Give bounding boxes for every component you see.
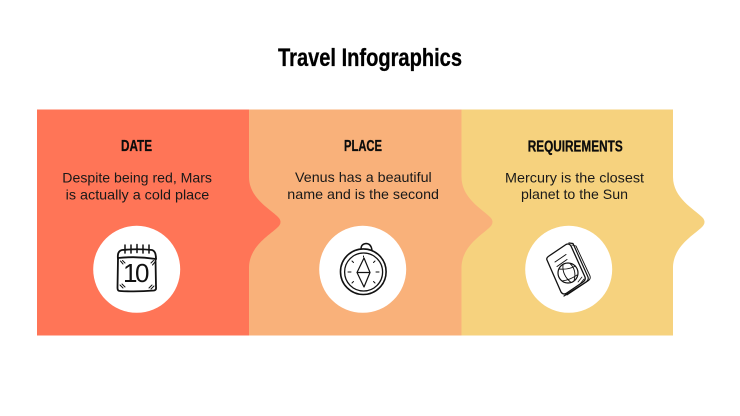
heading: requirements: REQUIREMENTS (528, 138, 623, 156)
text block: date: is actually a cold place (66, 186, 210, 202)
panel: date (37, 110, 280, 336)
text block: date: Despite being red, Mars (62, 170, 212, 186)
title: Travel Infographics (278, 44, 462, 72)
panel: requirements (461, 110, 704, 336)
text block: place (287, 169, 439, 202)
panel: place (249, 110, 492, 336)
icon: calendar: 10 (123, 258, 149, 288)
text block: requirements (505, 170, 644, 202)
text block: requirements: Mercury is the closest (505, 170, 644, 186)
icon: passport (525, 226, 612, 313)
heading: date: DATE (121, 138, 152, 155)
icon: calendar (93, 226, 180, 313)
text block: place: Venus has a beautiful (295, 169, 432, 185)
icon: compass (319, 226, 406, 313)
text block: date (62, 170, 212, 202)
heading: place: PLACE (344, 138, 382, 155)
text block: place: name and is the second (287, 186, 439, 202)
text block: requirements: planet to the Sun (521, 186, 628, 202)
